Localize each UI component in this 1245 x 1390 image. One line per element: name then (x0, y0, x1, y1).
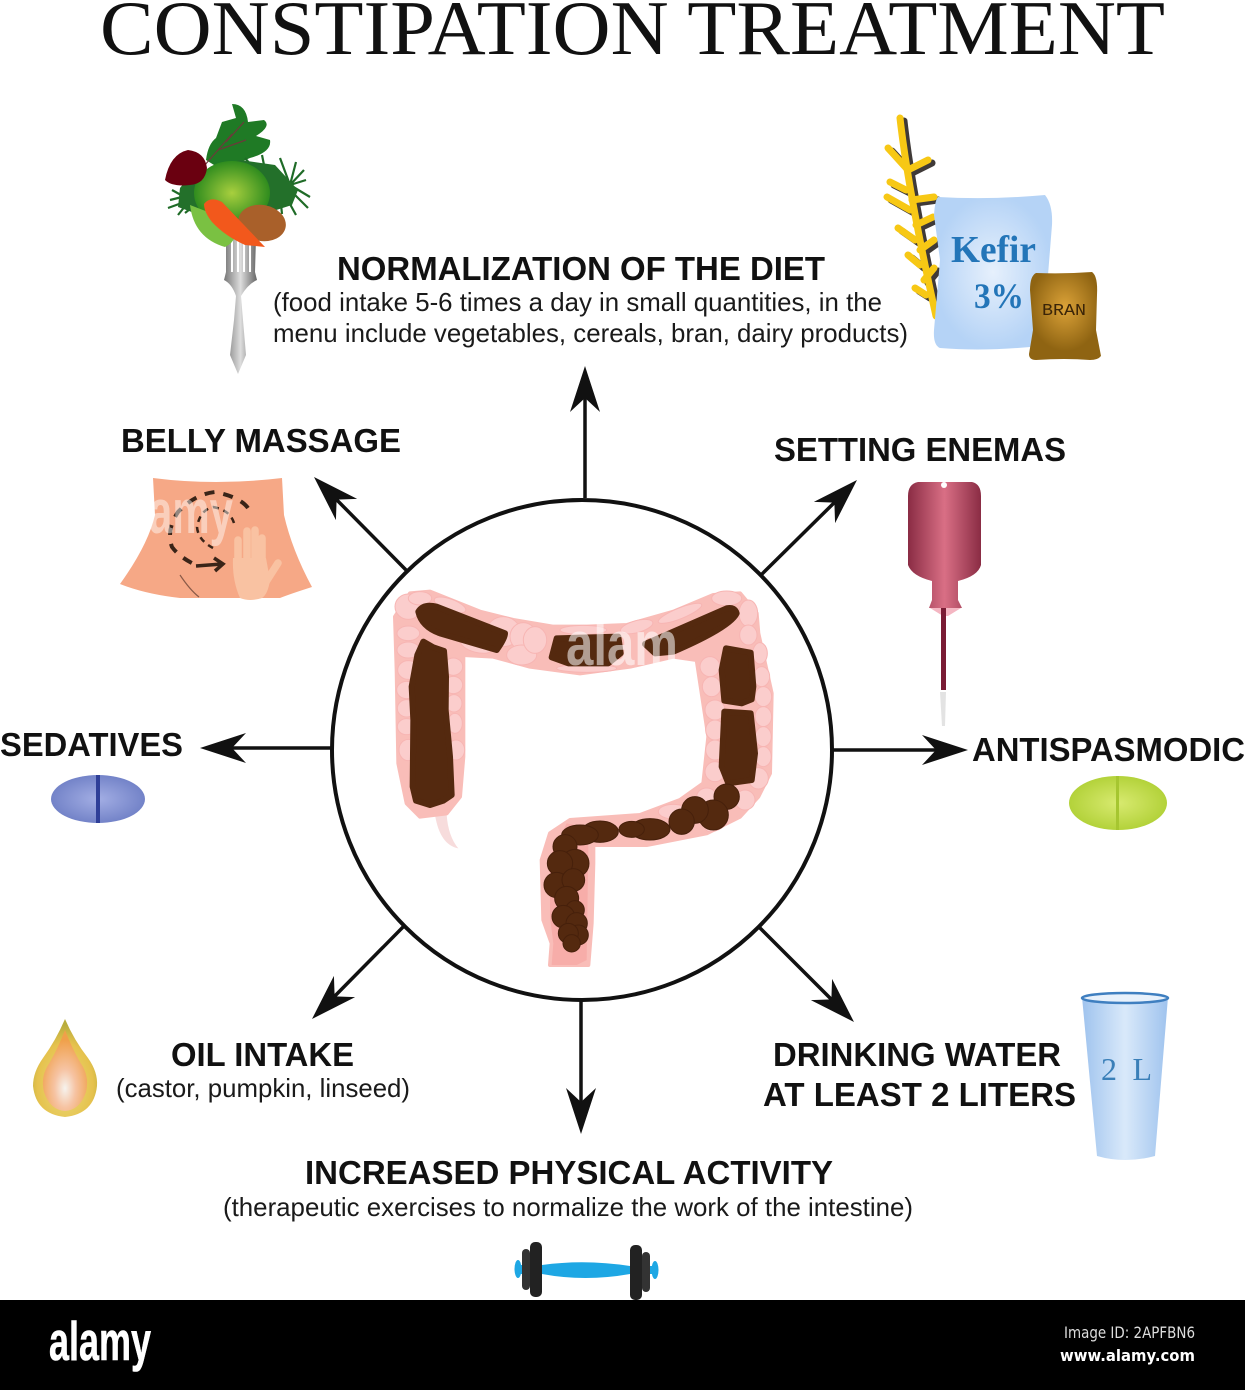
stool lumps (544, 784, 739, 952)
icon: kefir bag (934, 195, 1052, 349)
haustra bumps (395, 591, 772, 834)
icon: belly massage (120, 478, 312, 600)
label: increased physical activity (223, 1154, 913, 1222)
icon: vegetables on a fork (165, 104, 310, 374)
label: drinking water: AT LEAST 2 LITERS (763, 1076, 1076, 1113)
icon: wheat ear (887, 118, 940, 319)
icon: oil drop (33, 1019, 97, 1117)
icon: blue pill (51, 775, 145, 823)
label: increased physical activity: (therapeutic exercises to normalize the work of the intestine) (223, 1192, 913, 1222)
label: normalization of the diet (273, 250, 908, 348)
footer bar: Image ID: 2APFBN6 (1064, 1323, 1195, 1342)
colon illustration (395, 591, 772, 965)
label: drinking water (763, 1036, 1076, 1113)
label: oil intake (116, 1036, 410, 1103)
label: normalization of the diet: menu include vegetables, cereals, bran, dairy products) (273, 318, 908, 348)
icon: belly massage: amy (149, 478, 233, 547)
footer bar: www.alamy.com (1060, 1346, 1195, 1365)
arrow: down to activity (566, 1001, 596, 1134)
label: increased physical activity: INCREASED PHYSICAL ACTIVITY (305, 1154, 833, 1191)
footer bar (0, 1300, 1245, 1390)
arrow: right to antispasmodic (833, 735, 968, 765)
icon: kefir bag: 3% (974, 276, 1024, 316)
icon: dumbbell (514, 1242, 658, 1300)
label: antispasmodic: ANTISPASMODIC (972, 731, 1245, 768)
label: oil intake: OIL INTAKE (171, 1036, 354, 1073)
arrow: down-right to water (758, 926, 865, 1033)
stool masses (412, 606, 755, 805)
label: setting enemas: SETTING ENEMAS (774, 431, 1066, 468)
icon: kefir bag: Kefir (951, 229, 1036, 271)
label: oil intake: (castor, pumpkin, linseed) (116, 1073, 410, 1103)
icon: water glass: 2 L (1101, 1051, 1152, 1087)
label: drinking water: DRINKING WATER (773, 1036, 1061, 1073)
watermark over colon: alam (566, 610, 678, 679)
icon: water glass (1082, 993, 1168, 1160)
arrow: up-left to massage (303, 466, 407, 571)
arrow: up to diet (570, 366, 600, 498)
arrow: down-left to oil (301, 925, 405, 1030)
arrow: left to sedatives (200, 733, 332, 763)
dill fronds (168, 155, 310, 215)
footer bar: alamy (49, 1310, 151, 1372)
icon: bran bag: BRAN (1042, 302, 1086, 321)
label: belly massage: BELLY MASSAGE (121, 422, 401, 459)
icon: green pill (1069, 776, 1167, 830)
arrow: up-right to enemas (761, 469, 868, 575)
central circle (332, 500, 832, 1000)
label: sedatives: SEDATIVES (0, 726, 183, 763)
icon: bran bag (1029, 272, 1101, 360)
label: normalization of the diet: NORMALIZATION OF THE DIET (337, 250, 825, 287)
label: normalization of the diet: (food intake 5-6 times a day in small quantities, in the (273, 287, 882, 317)
icon: enema bag (908, 482, 981, 726)
